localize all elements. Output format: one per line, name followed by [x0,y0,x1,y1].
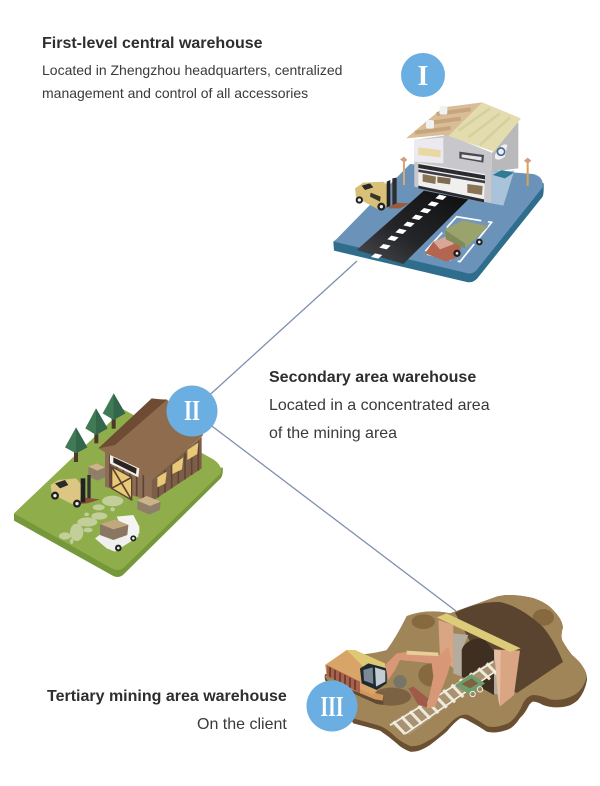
heading block: first-level warehouse: First-level central warehouse [42,35,263,52]
heading block: secondary warehouse [269,369,490,442]
badge II [166,386,218,436]
trees [65,393,125,462]
grass platform [14,409,223,577]
rail tracks [388,660,499,735]
road [357,191,468,264]
heading block: first-level warehouse: management and control of all accessories [42,85,308,101]
badge III: III [320,692,344,723]
badge I [401,53,445,97]
forklift [355,178,409,211]
illustration: central warehouse [333,102,544,282]
parking bay and truck [423,217,492,262]
crates [88,463,161,515]
ground [325,595,587,752]
tunnel portal [437,613,521,707]
white cart with crates [95,515,139,552]
tunnel mound [453,602,563,695]
lamp posts [400,157,531,186]
illustration: barn area [14,393,223,577]
badge III [306,680,358,732]
stepping stones [59,496,123,544]
badge II: II [184,396,200,427]
heading block: tertiary warehouse [47,688,287,733]
heading block: tertiary warehouse: On the client [197,716,287,733]
connector lines [192,261,456,611]
platform [333,164,544,282]
badge I: I [418,61,428,92]
mine cart [455,674,485,697]
illustration: mine [325,595,587,752]
heading block: secondary warehouse: Located in a concentrated area [269,397,490,414]
forklift [51,475,100,508]
heading block: first-level warehouse [42,35,342,101]
warehouse building [406,102,521,206]
heading block: tertiary warehouse: Tertiary mining area warehouse [47,688,287,705]
barn [98,398,203,502]
heading block: secondary warehouse: of the mining area [269,425,397,442]
heading block: first-level warehouse: Located in Zhengzhou headquarters, centralized [42,62,342,78]
excavator [325,647,452,708]
heading block: secondary warehouse: Secondary area warehouse [269,369,476,386]
